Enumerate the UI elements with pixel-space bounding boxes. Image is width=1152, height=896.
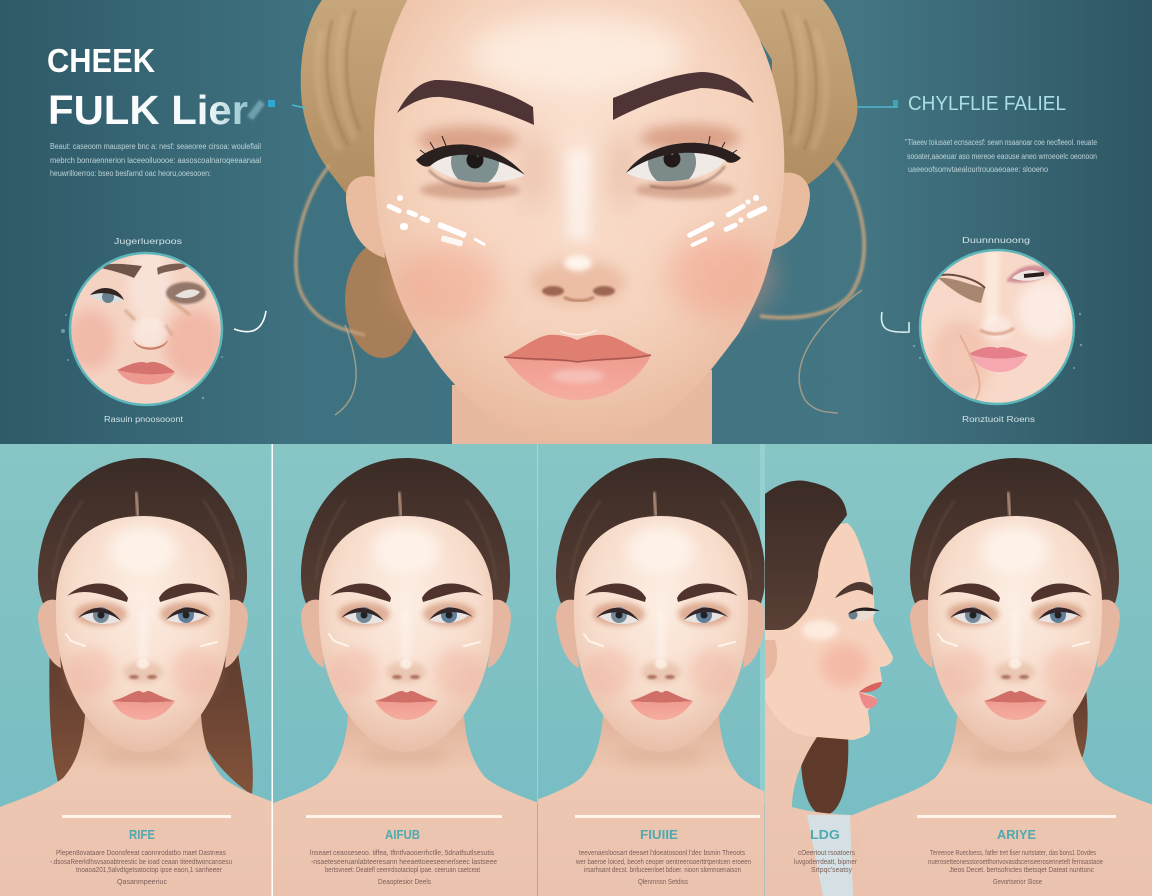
right bracket arrow — [881, 312, 909, 332]
description: right: Tereenoe Ruecloess, fatfer tret fiser nurtstater, das bons1 Dovdes — [930, 850, 1096, 857]
intro paragraph, left — [50, 142, 261, 178]
intro paragraph, left: Beaut: caseoom mauspere bnc a: nesf: seaeoree cirsoa: wouleflail — [50, 142, 261, 151]
intro paragraph, right: "Tlaeev toiusaet ecnsacesf: sewn nsaanoar coe necfleeol. neuate — [905, 138, 1097, 147]
description: irsarhsant decst. bnfuceenloet bdoer. nioon slomnoenaison — [584, 867, 741, 874]
profile face — [765, 523, 893, 740]
hair: blonde updo — [296, 0, 864, 415]
description: Deaoptesior Deels — [378, 879, 431, 886]
description: tnoaoa201,5alvdtgetsatoctop ipse eaon,1 sanheeer — [76, 867, 223, 874]
right heading: CHYLFLIE FALIEL — [908, 93, 1066, 115]
title — [47, 42, 248, 133]
left circle label, top: Jugerluerpoos — [114, 237, 182, 246]
intro paragraph, left: heuwrilloerroo: bseo besfarnd oac heoru,ooesooen: — [50, 169, 211, 178]
panel: front view 3 — [538, 458, 764, 896]
panel: front view 1 — [0, 458, 272, 896]
title line: FULK Lier: FULK Lier — [48, 87, 248, 133]
label: RIFE — [129, 827, 155, 842]
description: bertsvneet: Deatefl ceenrdsotactopl ipae. ceeruan caetceat — [325, 867, 480, 874]
right eyebrow — [613, 72, 754, 120]
lips — [504, 330, 651, 400]
right circle label, bottom: Ronztuoit Roens — [962, 415, 1035, 424]
description: wer baeroe loiced, beceh ceoper oentreensoerttrtpentcen eroeen — [575, 859, 751, 866]
left circular inset: before face — [61, 245, 225, 405]
label: FIUIIE — [640, 827, 678, 842]
ponytail — [801, 735, 848, 815]
description: left — [794, 850, 858, 874]
divider line — [917, 815, 1116, 818]
long hair — [49, 640, 253, 795]
panel divider — [272, 444, 273, 896]
description: lnseaet ceaoseseoo. tiffea, tftntfvaooerrhctlle, 5dnatfsutlsesutis — [310, 850, 494, 857]
divider line — [575, 815, 760, 818]
front portrait — [805, 458, 1152, 896]
right eye — [626, 124, 741, 199]
profile hair — [765, 480, 847, 630]
intro paragraph, right: uaeeoofsomvtaealourlrouoaeoaee: slooeno — [908, 165, 1048, 174]
description: Plepen8ovataare Doonsfeeat caonnrodatbo maet Dastneas — [56, 850, 226, 857]
profile eye — [848, 608, 880, 621]
profile eyebrow — [835, 582, 873, 598]
right circle label, top: Duunnnuoong — [962, 236, 1030, 245]
description: right: nuerosetteonesstoroetthonvovasdscenseerosennetelt fernsastaoe — [928, 859, 1103, 866]
description: left: luvgoderrdeatt, bipmer — [794, 859, 858, 866]
profile cheek highlight — [802, 620, 838, 640]
neck — [452, 370, 712, 444]
portrait — [196, 458, 616, 896]
right circular inset: after face — [913, 250, 1082, 404]
description: teevenaesloosart deeaet l'doeatosoonl l'dec bsmin Theoots — [579, 850, 745, 857]
description: right — [928, 850, 1103, 886]
label: left: LDG — [810, 827, 840, 842]
profile cheek blush — [821, 643, 869, 687]
left circle label, bottom: Rasuin pnoosooont — [104, 415, 184, 424]
intro paragraph, right: sooater,aaoeuar aso mereoe eaouse aneo wrroeoelc oeonoon — [907, 152, 1097, 161]
description: Qasanmpeeriuc — [117, 879, 167, 886]
title line: CHEEK: CHEEK — [47, 42, 155, 79]
description: Qlenrnnsn Setdiss — [638, 879, 688, 886]
description: right: Gevortserior Slose — [993, 879, 1042, 886]
hero portrait — [296, 0, 864, 444]
description: left: cOeertout rsoatoers — [798, 850, 855, 857]
left bracket arrow — [234, 311, 266, 332]
label: right: ARIYE — [997, 827, 1036, 842]
filler marks: right cheek — [686, 195, 768, 248]
description — [310, 850, 497, 886]
description: -.dsosaReerktlhsvsaoabtreestic be ioad ceaan titeedtwoncansesu — [50, 859, 232, 866]
intro paragraph, left: mebrch bonraennerion laceeoiluoooe: aasoscoalnaroqeeaanaal — [50, 156, 261, 165]
panel: profile and front view 4 — [765, 458, 1152, 896]
left eye — [416, 126, 525, 199]
panel divider — [537, 444, 538, 804]
profile ear — [765, 640, 777, 680]
panel divider — [760, 444, 765, 804]
left eyebrow — [397, 80, 534, 125]
top panel background — [0, 0, 1152, 444]
panel: front view 2 — [273, 458, 537, 896]
nose — [530, 150, 626, 304]
description: right: Jteos Decet. bertsofnctes tbetsqet Dateat nunttonc — [949, 867, 1094, 874]
face — [374, 0, 784, 442]
profile neck and lower body — [765, 700, 854, 896]
ears — [346, 173, 810, 258]
intro paragraph, right — [905, 138, 1097, 174]
cheek blush — [393, 17, 772, 325]
description: left: Srtpqc'seatsy — [811, 867, 852, 874]
filler marks: left cheek — [386, 195, 486, 247]
left pointer — [250, 100, 305, 118]
label: AIFUB — [385, 827, 420, 842]
divider line — [62, 815, 231, 818]
divider line — [306, 815, 502, 818]
profile lips — [859, 682, 882, 709]
portrait — [451, 458, 871, 896]
description: -nsaeteseeruanlabteeresann heeaettoeeseenerlseec lastseee — [311, 859, 497, 866]
description — [50, 850, 232, 886]
portrait — [0, 458, 353, 896]
bottom panels background — [0, 444, 1152, 896]
description — [575, 850, 751, 886]
tape strip — [807, 815, 853, 896]
